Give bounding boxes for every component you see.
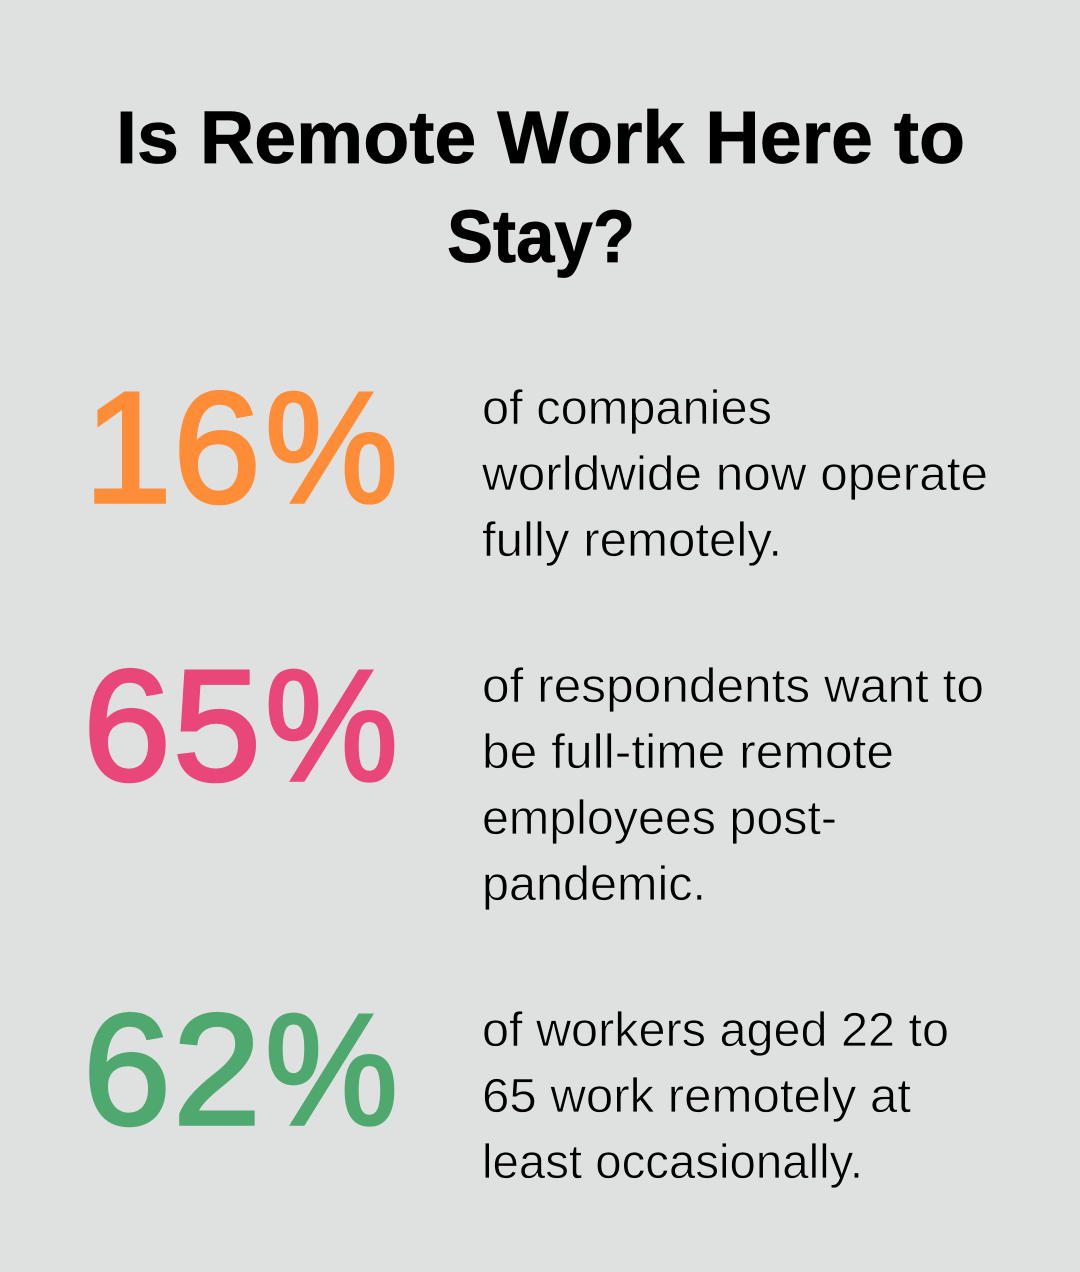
big number: 62%: [83, 982, 398, 1158]
title: Stay?: [447, 195, 635, 278]
text block: 65% description: employees post-: [482, 792, 837, 845]
text block: 65% description: pandemic.: [482, 858, 706, 911]
panel: statistic 65%: [83, 638, 984, 911]
big number: 16%: [84, 360, 398, 536]
text block: 16% description: worldwide now operate: [481, 448, 988, 501]
big number: 16%: 16: [84, 360, 261, 536]
text block: 65% description: be full-time remote: [482, 726, 894, 779]
panel: statistic 62%: [83, 982, 949, 1189]
text block: 65% description: [482, 660, 984, 911]
text block: 16% description: [481, 382, 988, 567]
title: [116, 96, 965, 278]
big number: 65%: %: [265, 638, 398, 814]
big number: 65%: 65: [83, 638, 261, 814]
text block: 62% description: least occasionally.: [482, 1136, 863, 1189]
title: Is Remote Work Here to: [116, 96, 965, 179]
text block: 62% description: 65 work remotely at: [482, 1070, 911, 1123]
text block: 16% description: fully remotely.: [482, 514, 782, 567]
panel: statistic 16%: [84, 360, 988, 567]
text block: 62% description: of workers aged 22 to: [482, 1004, 949, 1057]
text block: 65% description: of respondents want to: [482, 660, 984, 713]
text block: 62% description: [482, 1004, 949, 1189]
big number: 62%: 62: [83, 982, 261, 1158]
text block: 16% description: of companies: [482, 382, 772, 435]
big number: 65%: [83, 638, 398, 814]
big number: 16%: %: [265, 360, 398, 536]
big number: 62%: %: [265, 982, 398, 1158]
